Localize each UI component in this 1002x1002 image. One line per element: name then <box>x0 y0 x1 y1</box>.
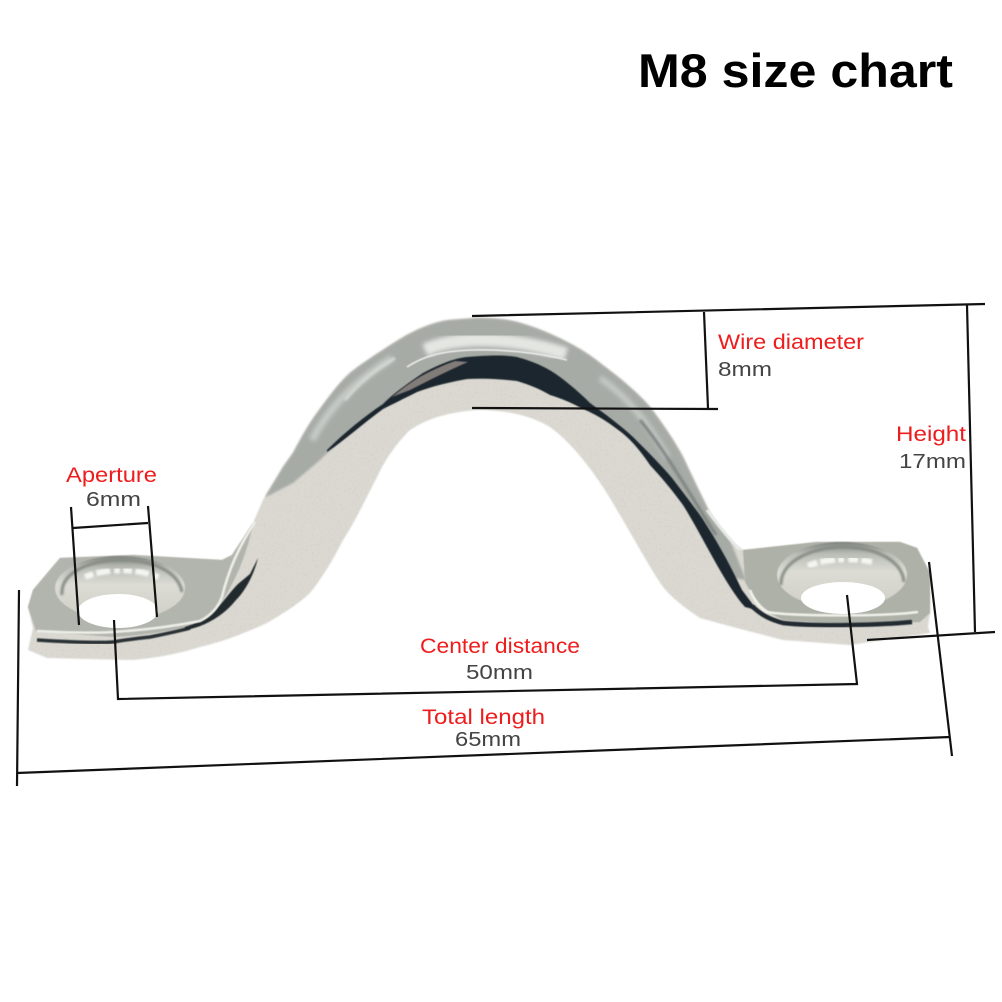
left flange edge shadow <box>37 628 190 642</box>
dark reflection band <box>327 356 757 610</box>
dimension: total length: 65mm <box>455 729 521 751</box>
arch top highlight <box>425 340 566 354</box>
left hole <box>78 594 158 628</box>
right countersink <box>777 542 907 608</box>
dimension: height: Height <box>896 422 966 446</box>
warm left part of the dark band <box>392 361 468 397</box>
arch right flank dark sheen <box>640 420 716 535</box>
dimension: total length: Total length <box>422 705 545 729</box>
arch left highlight <box>312 358 392 440</box>
dimension: height <box>867 305 995 640</box>
right countersink dark rim <box>781 547 904 585</box>
polished upper band of the arch <box>265 318 746 580</box>
left countersink dark rim <box>62 560 182 595</box>
product photo: stainless steel pad eye <box>28 318 930 660</box>
dimension: aperture <box>66 463 157 625</box>
title: M8 size chart <box>638 44 953 97</box>
left countersink mottled shine <box>85 570 160 578</box>
dimension: aperture: 6mm <box>86 489 141 511</box>
right flange edge shadow <box>752 606 912 625</box>
left flange plate <box>28 523 253 637</box>
dimension: center distance <box>114 595 857 699</box>
dimension: wire diameter: Wire diameter <box>718 330 864 354</box>
dimension: wire diameter <box>472 304 985 409</box>
dimension: center distance: 50mm <box>466 662 533 684</box>
white line above dark band <box>407 350 567 367</box>
dimension: center distance: Center distance <box>420 634 580 658</box>
arch left pale stripe <box>345 358 395 400</box>
right hole <box>801 582 885 614</box>
dimension: wire diameter: 8mm <box>718 359 772 381</box>
steel body silhouette <box>28 318 930 660</box>
dimension: aperture: Aperture <box>66 463 157 487</box>
dimension: total length <box>17 562 952 786</box>
right flange bright rim <box>750 590 918 615</box>
dimension: height: 17mm <box>899 451 966 473</box>
left flange bright rim <box>37 522 255 633</box>
bright sliver beside the right arch foot <box>707 510 740 550</box>
right countersink mottled shine <box>808 559 872 566</box>
arch right highlight <box>600 378 668 458</box>
left countersink <box>55 556 185 620</box>
right flange plate <box>743 542 930 623</box>
left flange inner dark wedge <box>185 558 258 630</box>
